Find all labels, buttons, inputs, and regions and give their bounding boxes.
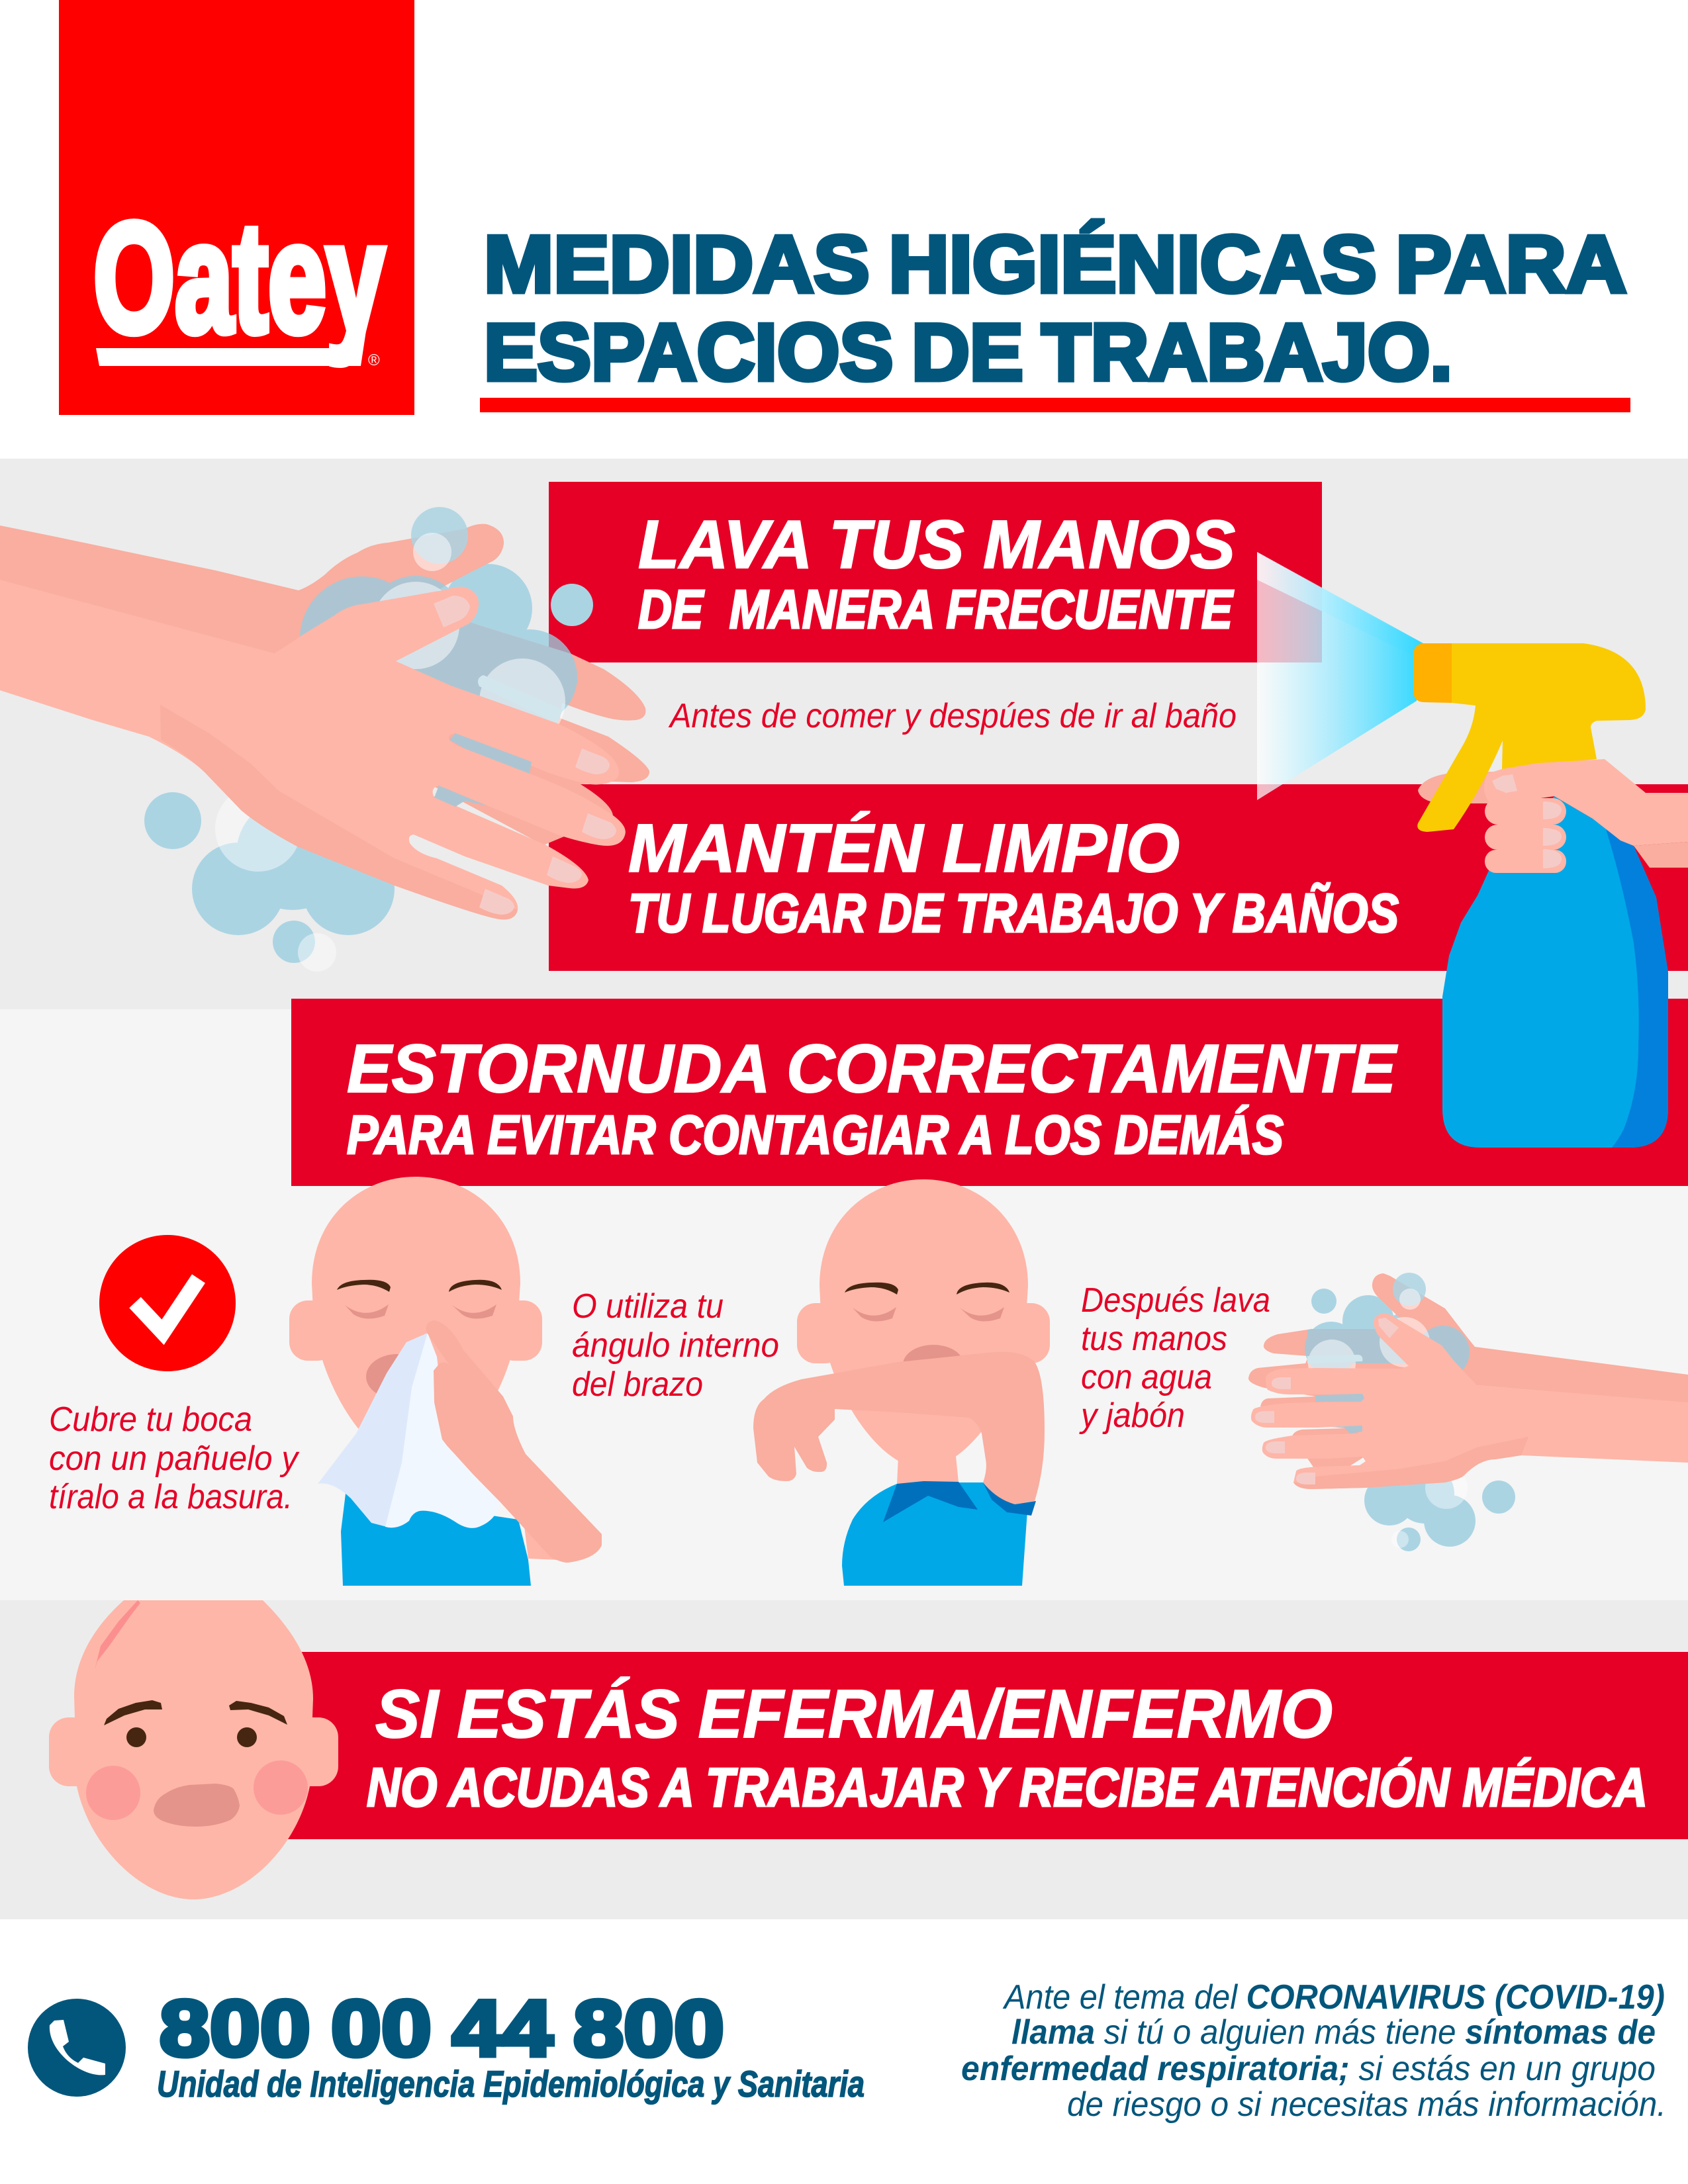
illustration: person sneezing into tissue bbox=[289, 1177, 602, 1586]
band: middle light background bbox=[0, 1009, 1688, 1600]
icon: telephone bbox=[28, 1999, 126, 2097]
illustration: sick face bbox=[49, 1600, 338, 1899]
banner: si estás enferma bbox=[285, 1652, 1688, 1839]
text: o utiliza tu bbox=[572, 1287, 779, 1404]
text: después lava: con agua bbox=[1081, 1358, 1212, 1396]
illustration: hands washed with soap bbox=[1248, 1273, 1688, 1551]
text: antes de comer: Antes de comer y despúes de ir al baño bbox=[668, 697, 1237, 735]
text: después lava: tus manos bbox=[1081, 1320, 1227, 1358]
text: o utiliza tu: O utiliza tu bbox=[572, 1287, 724, 1326]
text: después lava bbox=[1079, 1281, 1270, 1435]
banner: mantén limpio: MANTÉN LIMPIO bbox=[628, 810, 1180, 886]
banner: lava tus manos: LAVA TUS MANOS bbox=[638, 506, 1235, 582]
illustration: washing hands with soap bbox=[0, 507, 649, 972]
text: o utiliza tu: ángulo interno bbox=[572, 1326, 779, 1365]
text: coronavirus information bbox=[961, 1978, 1666, 2124]
banner: si estás enferma: SI ESTÁS EFERMA/ENFERMO bbox=[375, 1676, 1333, 1752]
logo: Oatey: Oatey bbox=[93, 191, 385, 365]
illustration: person sneezing into elbow bbox=[753, 1179, 1050, 1586]
text: después lava: Después lava bbox=[1081, 1281, 1270, 1320]
text: unidad de inteligencia: Unidad de Inteligencia Epidemiológica y Sanitaria bbox=[157, 2063, 865, 2105]
banner: estornuda correctamente bbox=[291, 999, 1688, 1186]
banner: lava tus manos bbox=[549, 482, 1322, 662]
banner: mantén limpio bbox=[549, 784, 1688, 971]
banner: estornuda correctamente: PARA EVITAR CONTAGIAR A LOS DEMÁS bbox=[347, 1104, 1284, 1165]
band: bottom grey background bbox=[0, 1600, 1688, 1919]
band: top grey background bbox=[0, 459, 1688, 1009]
text: coronavirus information: de riesgo o si necesitas más información. bbox=[1067, 2085, 1666, 2124]
title: MEDIDAS HIGIÉNICAS PARA bbox=[484, 219, 1626, 309]
text: cubre tu boca: con un pañuelo y bbox=[49, 1439, 300, 1478]
text: después lava: y jabón bbox=[1079, 1396, 1185, 1435]
phone number: 800 00 44 800 bbox=[160, 1984, 724, 2073]
text: coronavirus information: enfermedad respiratoria; si estás en un grupo bbox=[961, 2050, 1656, 2088]
banner: mantén limpio: TU LUGAR DE TRABAJO Y BAÑOS bbox=[628, 882, 1399, 944]
text: cubre tu boca bbox=[49, 1400, 300, 1516]
logo: Oatey: ® bbox=[368, 351, 380, 369]
icon: check mark bbox=[99, 1235, 236, 1371]
banner: lava tus manos: DE MANERA FRECUENTE bbox=[638, 578, 1234, 640]
text: coronavirus information: Ante el tema del CORONAVIRUS (COVID-19) bbox=[1002, 1978, 1665, 2017]
logo: Oatey bbox=[59, 0, 414, 415]
title bbox=[480, 219, 1630, 412]
text: coronavirus information: llama si tú o alguien más tiene síntomas de bbox=[1011, 2013, 1656, 2052]
text: cubre tu boca: tíralo a la basura. bbox=[49, 1478, 293, 1516]
title: ESPACIOS DE TRABAJO. bbox=[484, 307, 1452, 397]
text: o utiliza tu: del brazo bbox=[572, 1365, 703, 1404]
text: cubre tu boca: Cubre tu boca bbox=[49, 1400, 252, 1439]
banner: estornuda correctamente: ESTORNUDA CORRECTAMENTE bbox=[347, 1030, 1398, 1107]
illustration: spray bottle held by hand bbox=[1257, 552, 1688, 1148]
